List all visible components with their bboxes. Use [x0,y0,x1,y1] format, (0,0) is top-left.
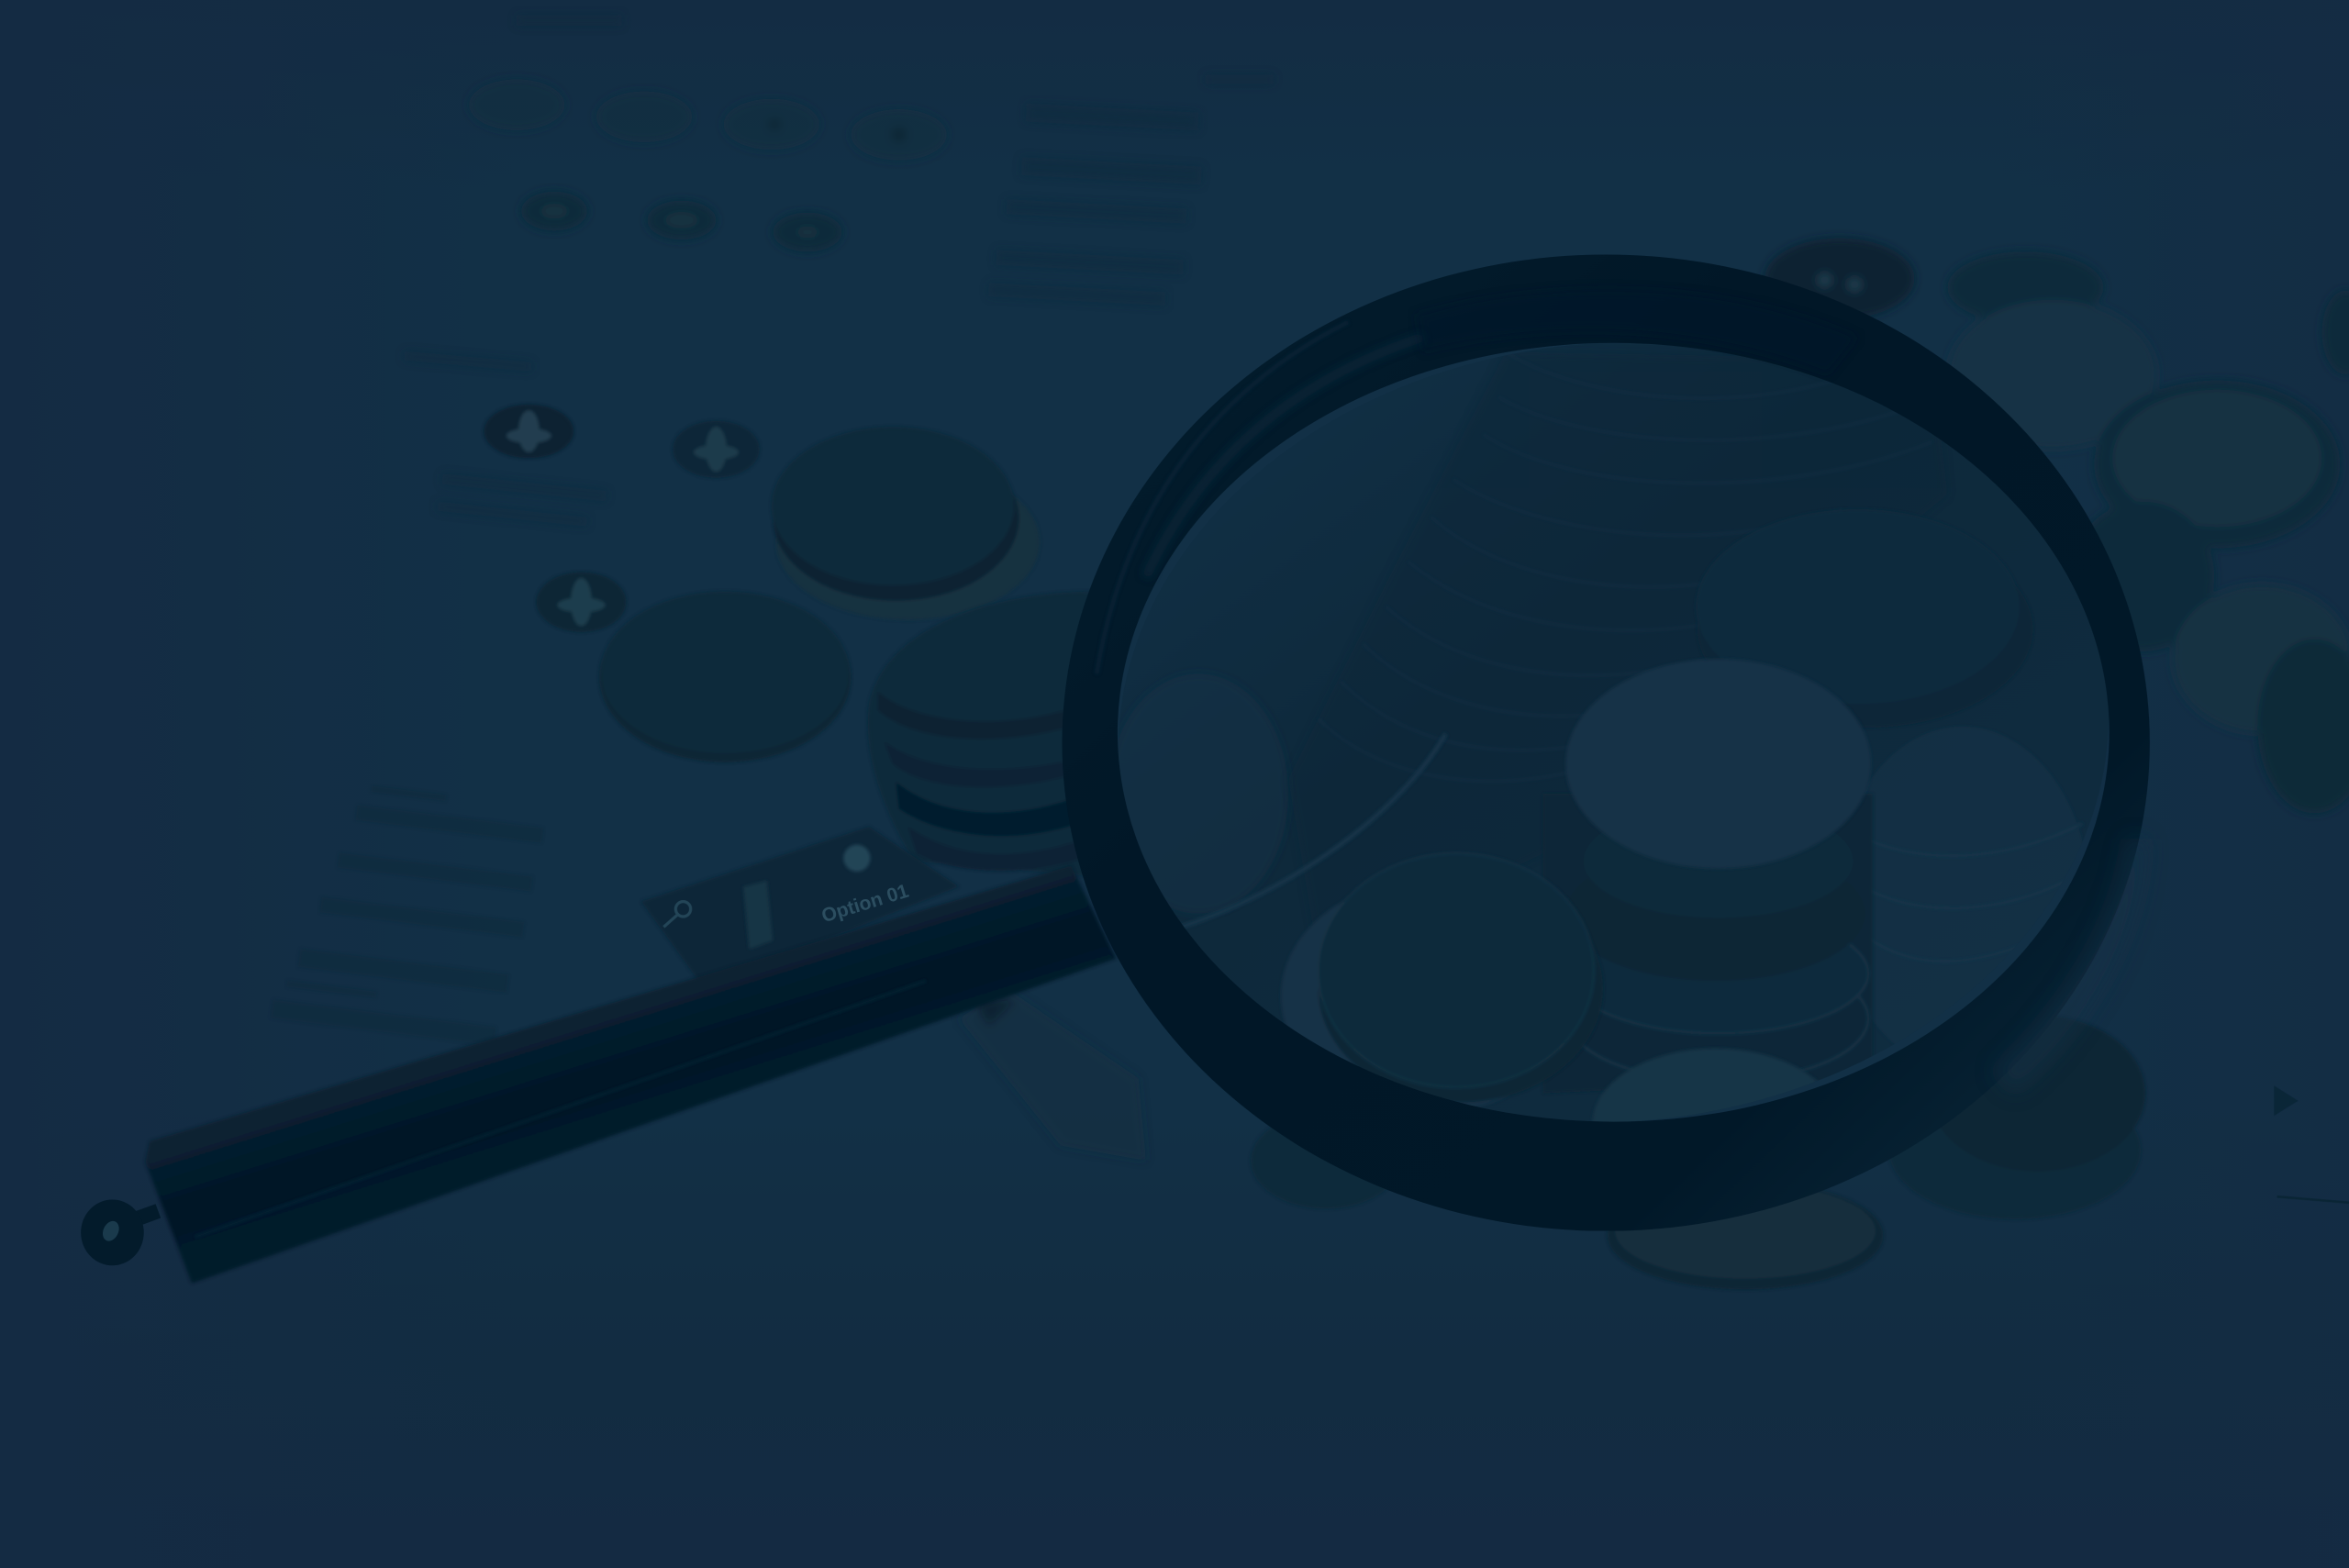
upper right coins [1765,239,2349,813]
rim top dark glare band [1416,289,1857,374]
far blurred text lines on paper [404,15,1274,527]
bottom light coin [1595,1048,1815,1121]
rim fading lower right [1992,839,2147,1094]
printed icon badges with crosses [484,405,760,632]
central coin stack [1586,795,1874,1020]
magnified right coin [1696,509,2033,728]
dark mass behind coins [1288,352,1947,959]
low-contrast lower document text [271,777,546,1048]
coin: upper flat coin with lighter coin below [772,427,1040,620]
magnified background coin, left [1108,674,1288,914]
coin stack behind handle [868,592,1094,876]
rim inner highlights, upper-left [1146,337,1423,576]
background photo: magnifying glass on coins and documents, navy duotone [81,121,2349,1290]
central light coin [1565,659,1871,869]
handle ring [81,1199,161,1265]
magnifier rim [1063,254,2150,1231]
coin: lower flat coin [599,592,851,762]
magnifier lens contents [1172,345,2101,1121]
card label: Option 01 [819,881,911,927]
thin dark line at right edge [2277,1196,2349,1203]
lower coins beneath magnifier [1251,1016,2145,1289]
small triangle marker on paper [2274,1085,2298,1116]
far printed icons on paper [469,80,947,251]
magnified coin stack receding to top [1319,352,1932,781]
right coin stack lines [1875,826,2077,963]
lower-left magnified coin [1282,902,1601,1106]
diagonal coin edge [1176,734,1446,929]
magnifier handle [145,865,1116,1284]
option card [641,827,959,988]
faint card under handle [959,988,1146,1161]
